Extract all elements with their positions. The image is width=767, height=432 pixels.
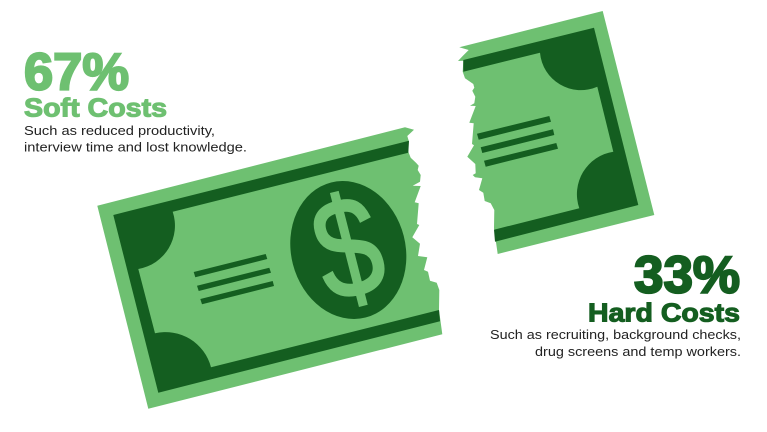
text block: hard costs (490, 246, 741, 359)
serial lines (194, 254, 274, 304)
soft costs description: interview time and lost knowledge. (24, 140, 247, 154)
serial lines (477, 116, 558, 167)
bill body (458, 11, 654, 254)
text block: soft costs (24, 43, 247, 154)
bill body (97, 127, 442, 409)
left bill piece (97, 127, 442, 409)
soft costs percentage: 67% (24, 43, 129, 101)
hard costs description: Such as recruiting, background checks, (490, 327, 741, 342)
soft costs heading: Soft Costs (24, 93, 167, 123)
soft costs description (24, 123, 247, 154)
hard costs percentage: 33% (634, 246, 740, 304)
dark frame (463, 28, 638, 242)
oval portrait (276, 168, 421, 332)
right bill piece (458, 11, 654, 254)
hard costs description: drug screens and temp workers. (535, 344, 741, 359)
dark frame (113, 141, 440, 393)
soft costs description: Such as reduced productivity, (24, 123, 215, 138)
dollar sign: $ (297, 164, 399, 333)
hard costs description (490, 327, 741, 359)
hard costs heading: Hard Costs (588, 298, 740, 328)
